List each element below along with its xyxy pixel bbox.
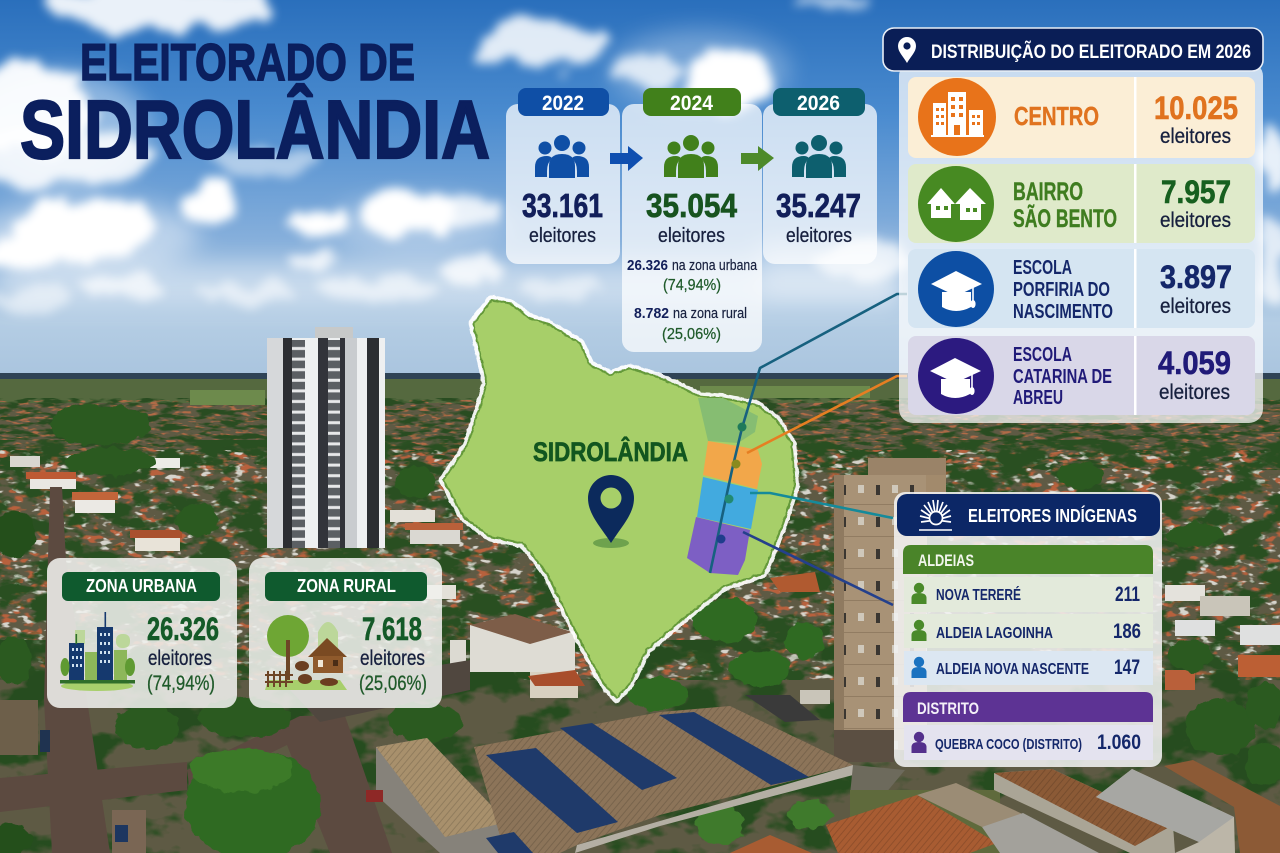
row: Aldeia Lagoinha — [904, 614, 1153, 648]
row: Bairro São Bento — [908, 164, 1255, 243]
card 2022 — [506, 88, 620, 264]
row: Escola Catarina de Abreu: ABREU — [1013, 387, 1063, 409]
row: Escola Porfiria do Nascimento — [908, 249, 1255, 328]
panel: urban zone: (74,94%) — [147, 672, 215, 695]
row: Aldeia Nova Nascente: 147 — [1114, 656, 1140, 679]
icon: city buildings — [931, 92, 984, 137]
arrow: 2024 to 2026 — [741, 146, 774, 171]
ground — [0, 373, 1280, 853]
card 2024: (25,06%) — [662, 326, 721, 343]
row: Aldeia Lagoinha: ALDEIA LAGOINHA — [936, 625, 1053, 642]
row: Nova Tereré: NOVA TERERÉ — [936, 585, 1021, 604]
title: SIDROLÂNDIA — [20, 83, 490, 176]
row: Escola Porfiria do Nascimento: eleitores — [1160, 295, 1231, 318]
panel: rural zone: 7.618 — [362, 611, 422, 647]
panel header: ELEITORES INDÍGENAS — [968, 505, 1137, 526]
card 2024 — [622, 88, 762, 352]
row: Aldeia Lagoinha: 186 — [1113, 620, 1141, 643]
row: Escola Catarina de Abreu: eleitores — [1159, 381, 1230, 404]
row: Nova Tereré — [904, 577, 1153, 612]
row: Escola Porfiria do Nascimento: 3.897 — [1160, 259, 1232, 295]
row: Escola Catarina de Abreu: CATARINA DE — [1013, 366, 1112, 388]
panel: urban zone — [47, 558, 237, 708]
card 2026 — [763, 88, 877, 264]
card 2022: 33.161 — [522, 187, 603, 224]
row: Escola Catarina de Abreu: 4.059 — [1158, 345, 1231, 381]
municipality map — [443, 300, 795, 698]
panel: urban zone: eleitores — [148, 647, 212, 670]
icon: location pin — [588, 475, 634, 548]
road — [44, 487, 110, 853]
houses left of map and right of tower — [10, 456, 1280, 704]
row: Quebra Coco: QUEBRA COCO (DISTRITO) — [935, 736, 1082, 753]
card 2024: 35.054 — [646, 187, 738, 224]
row: Quebra Coco: 1.060 — [1097, 731, 1141, 754]
section: aldeias — [903, 545, 1153, 685]
card 2026: 2026 — [797, 92, 840, 115]
map outline — [443, 300, 795, 698]
card 2026: 35.247 — [776, 187, 861, 224]
row: Escola Porfiria do Nascimento: NASCIMENTO — [1013, 301, 1113, 323]
icon: graduation cap — [930, 358, 981, 398]
bottom left sidewalks and cars — [0, 700, 383, 853]
card 2024: 2024 — [670, 92, 713, 115]
map districts — [687, 398, 762, 575]
row: Escola Catarina de Abreu: ESCOLA — [1013, 344, 1072, 366]
houses below map — [470, 620, 575, 672]
panel: urban zone: ZONA URBANA — [86, 576, 197, 596]
icon: two houses — [927, 188, 986, 220]
row: Bairro São Bento: 7.957 — [1161, 174, 1231, 210]
section: distrito: DISTRITO — [917, 699, 979, 718]
row: Escola Catarina de Abreu — [908, 336, 1255, 415]
warehouse with solar panels — [376, 695, 905, 853]
arrow: 2022 to 2024 — [610, 146, 643, 171]
panel: rural zone — [249, 558, 442, 708]
row: Quebra Coco — [904, 725, 1153, 760]
tan tower — [834, 458, 946, 762]
row: Aldeia Nova Nascente — [904, 651, 1153, 685]
panel: distribution of electorate 2026 — [883, 28, 1263, 423]
icon: farm with tree, house and animals — [265, 615, 347, 690]
panel: urban zone: 26.326 — [147, 611, 219, 647]
panel: rural zone: eleitores — [360, 647, 425, 670]
card 2022: eleitores — [529, 225, 596, 247]
row: Centro: CENTRO — [1014, 101, 1099, 131]
row: Bairro São Bento: eleitores — [1160, 209, 1231, 232]
card 2022: 2022 — [542, 92, 584, 115]
card 2024: 26.326 — [627, 257, 668, 274]
panel: indigenous voters — [894, 492, 1162, 767]
map label: SIDROLÂNDIA — [533, 436, 688, 467]
section: distrito — [903, 692, 1153, 760]
row: Centro: 10.025 — [1154, 90, 1238, 126]
section: aldeias: ALDEIAS — [918, 551, 974, 570]
card 2024: (74,94%) — [663, 277, 721, 294]
card 2024: na zona urbana — [672, 257, 758, 274]
row: Centro: eleitores — [1160, 125, 1231, 148]
connector lines from map to panels — [710, 294, 907, 605]
sky — [0, 0, 1280, 380]
panel: rural zone: (25,06%) — [359, 672, 427, 695]
panel: rural zone: ZONA RURAL — [297, 576, 396, 596]
title — [20, 34, 490, 176]
clouds — [0, 0, 1280, 310]
panel header — [897, 494, 1160, 536]
row: Bairro São Bento: SÃO BENTO — [1013, 203, 1117, 233]
trees: lower left cluster — [0, 405, 1280, 853]
icon: graduation cap — [931, 271, 982, 311]
icon: feather headdress — [919, 500, 952, 530]
row: Centro — [908, 77, 1255, 158]
panel: electorate timeline — [506, 88, 877, 352]
row: Escola Porfiria do Nascimento: PORFIRIA DO — [1013, 279, 1110, 301]
card 2024: eleitores — [658, 225, 725, 247]
bottom right roofs — [730, 760, 1280, 853]
icon: city skyline — [60, 612, 135, 691]
row: Escola Porfiria do Nascimento: ESCOLA — [1013, 257, 1072, 279]
white tower — [267, 327, 385, 548]
card 2024: 8.782 — [634, 305, 669, 322]
card 2026: eleitores — [786, 225, 852, 247]
card 2024: na zona rural — [673, 305, 747, 322]
row: Bairro São Bento: BAIRRO — [1013, 178, 1083, 206]
row: Aldeia Nova Nascente: ALDEIA NOVA NASCENTE — [936, 661, 1089, 678]
row: Nova Tereré: 211 — [1115, 583, 1140, 606]
panel header — [883, 28, 1263, 71]
title: ELEITORADO DE — [80, 34, 415, 92]
clouds: soft haze — [0, 30, 900, 308]
